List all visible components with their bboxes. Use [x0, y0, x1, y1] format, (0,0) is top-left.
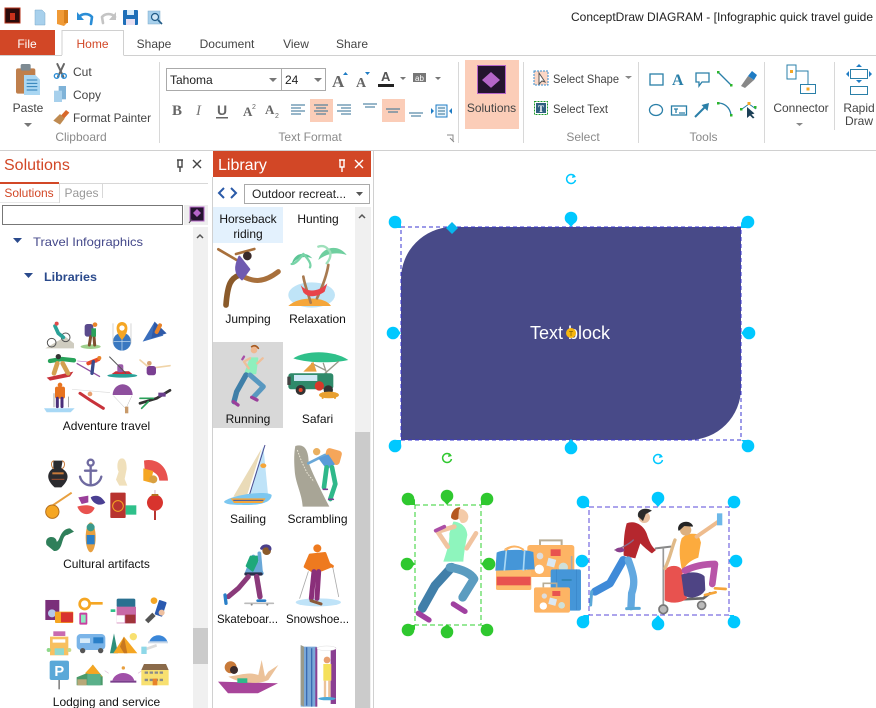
- scrollbar: [355, 207, 371, 708]
- dropdown: outdoor recreation: [244, 184, 370, 204]
- dialog launcher: [447, 135, 454, 142]
- item: relaxation: [288, 246, 347, 326]
- font size buttons: A: [356, 76, 367, 91]
- heading: library: [213, 151, 371, 177]
- style buttons: 2: [275, 113, 279, 120]
- navigation chevrons: [219, 188, 236, 198]
- item: safari: Safari: [302, 412, 333, 426]
- selection handles: [401, 490, 495, 638]
- font selector: [166, 68, 282, 90]
- style buttons: A: [265, 102, 275, 117]
- item: jumping: Jumping: [225, 312, 271, 326]
- item: skateboarder: Skateboar...: [217, 612, 278, 626]
- select group: Select Shape: [553, 72, 619, 86]
- panel: library: [212, 151, 374, 708]
- ribbon tabs: [0, 30, 876, 56]
- icon: cut: [54, 64, 66, 78]
- ribbon group dividers: [160, 62, 834, 143]
- item: hunting: Hunting: [297, 212, 339, 226]
- item: horseback riding: riding: [233, 227, 263, 241]
- style buttons: U: [217, 102, 227, 118]
- text handle: [566, 328, 576, 338]
- clipboard group: Copy: [73, 88, 101, 102]
- style buttons: 2: [252, 104, 256, 111]
- clipboard group: Paste: [13, 101, 44, 115]
- icon: paste: [16, 64, 40, 95]
- icon: select text: T: [538, 104, 544, 114]
- font colour: [378, 69, 441, 87]
- illustration: luggage: [495, 540, 581, 613]
- panel outlines: [212, 151, 374, 708]
- font colour: ab: [415, 74, 424, 83]
- rotation handle: [567, 174, 576, 183]
- style buttons: B: [172, 103, 182, 119]
- solutions button: Solutions: [467, 101, 516, 115]
- library: adventure travel: [44, 322, 170, 413]
- heading: solutions: Solutions: [4, 157, 70, 174]
- icon: copy: [54, 86, 66, 102]
- tree: libraries: Libraries: [44, 270, 97, 284]
- pin and close: [177, 160, 201, 172]
- ribbon tabs: View: [283, 37, 309, 51]
- item: scrambling: [287, 445, 348, 526]
- ribbon tabs: Document: [200, 37, 255, 51]
- clipboard group: Cut: [73, 65, 92, 79]
- item: sailing: Sailing: [230, 512, 266, 526]
- library: lodging and service: [45, 597, 169, 689]
- shape: rounded block: [401, 227, 741, 440]
- selection handles: [576, 492, 742, 630]
- size selector: 24: [285, 73, 299, 87]
- diamond handle: [446, 222, 458, 234]
- rapid draw button: [843, 64, 875, 128]
- label: adventure travel: Adventure travel: [63, 419, 150, 433]
- selection outline: [415, 505, 481, 625]
- style buttons: A: [243, 104, 253, 119]
- item: running: [213, 342, 283, 428]
- selection outline: [401, 227, 741, 440]
- tools group: [650, 71, 757, 144]
- label: text block: Text block: [530, 323, 611, 343]
- label: cultural artifacts: Cultural artifacts: [63, 557, 150, 571]
- selection handles: [387, 212, 755, 454]
- file tab: [0, 30, 55, 55]
- illustration: runner: [418, 507, 476, 620]
- tree: travel infographics: Travel Infographics: [33, 235, 143, 249]
- font size buttons: [332, 72, 370, 91]
- select group: Select Text: [553, 102, 609, 116]
- select group: Select: [566, 130, 600, 144]
- item: sailing: [224, 445, 272, 526]
- item: running: Running: [226, 412, 270, 426]
- item: safari: [287, 352, 348, 426]
- quick access toolbar: [5, 8, 162, 26]
- selection outline: [589, 507, 729, 615]
- clipboard group: Clipboard: [55, 130, 107, 144]
- illustration: travellers: [591, 509, 726, 614]
- text handle: T: [569, 331, 574, 338]
- canvas: text block shape: [387, 174, 755, 454]
- item: snowshoeing: Snowshoe...: [286, 612, 349, 626]
- window title: ConceptDraw DIAGRAM - [Infographic quick travel guide: [571, 10, 873, 24]
- icon: format painter: [53, 110, 69, 125]
- item: jumping: [218, 249, 278, 326]
- font size buttons: A: [332, 72, 345, 91]
- tabs: [0, 182, 208, 203]
- item: horseback riding: Horseback: [219, 212, 278, 226]
- library: lodging and service: P: [54, 664, 64, 680]
- select group: [534, 71, 632, 144]
- tools group: A: [672, 72, 684, 89]
- dropdown: outdoor recreation: Outdoor recreat...: [252, 187, 346, 201]
- panel: solutions: [0, 157, 208, 708]
- canvas: travellers selected: [576, 492, 742, 630]
- scrollbar: [193, 227, 208, 708]
- item: scrambling: Scrambling: [287, 512, 348, 526]
- search box: [2, 205, 208, 225]
- text format group: Text Format: [278, 130, 342, 144]
- solutions button: [465, 60, 519, 129]
- item: snowshoeing: [286, 544, 349, 626]
- font colour: A: [381, 69, 391, 84]
- clipboard group: Format Painter: [73, 111, 151, 125]
- file tab: File: [17, 37, 37, 51]
- icon: select shape: [534, 71, 548, 85]
- item: relaxation: Relaxation: [289, 312, 346, 326]
- canvas: runner selected: [401, 490, 495, 638]
- tabs: Pages: [64, 186, 99, 200]
- clipboard group: [13, 64, 151, 144]
- font selector: Tahoma: [170, 73, 213, 87]
- item: tanning booth: [301, 645, 336, 707]
- rapid draw button: Draw: [845, 114, 873, 128]
- tabs: Solutions: [4, 186, 54, 200]
- connector button: [773, 65, 829, 126]
- ribbon tabs: Share: [336, 37, 368, 51]
- item: skateboarder: [217, 546, 278, 626]
- text format group: [166, 68, 454, 144]
- library: cultural artifacts: [46, 458, 168, 552]
- style buttons: I: [195, 103, 202, 119]
- tree: libraries: [24, 270, 97, 284]
- canvas: rotation handles for lower shapes: [443, 453, 663, 463]
- ribbon tabs: Home: [76, 37, 109, 51]
- ribbon bottom border: [0, 150, 876, 152]
- rapid draw button: Rapid: [843, 101, 875, 115]
- item: sunbathing: [218, 660, 278, 693]
- style buttons: [172, 102, 279, 120]
- tools group: Tools: [689, 130, 718, 144]
- connector button: Connector: [773, 101, 829, 115]
- ribbon tabs: Shape: [137, 37, 172, 51]
- size selector: [282, 68, 326, 90]
- heading: library: Library: [218, 157, 267, 174]
- item: horseback riding: [213, 207, 283, 243]
- alignment buttons: [291, 99, 452, 122]
